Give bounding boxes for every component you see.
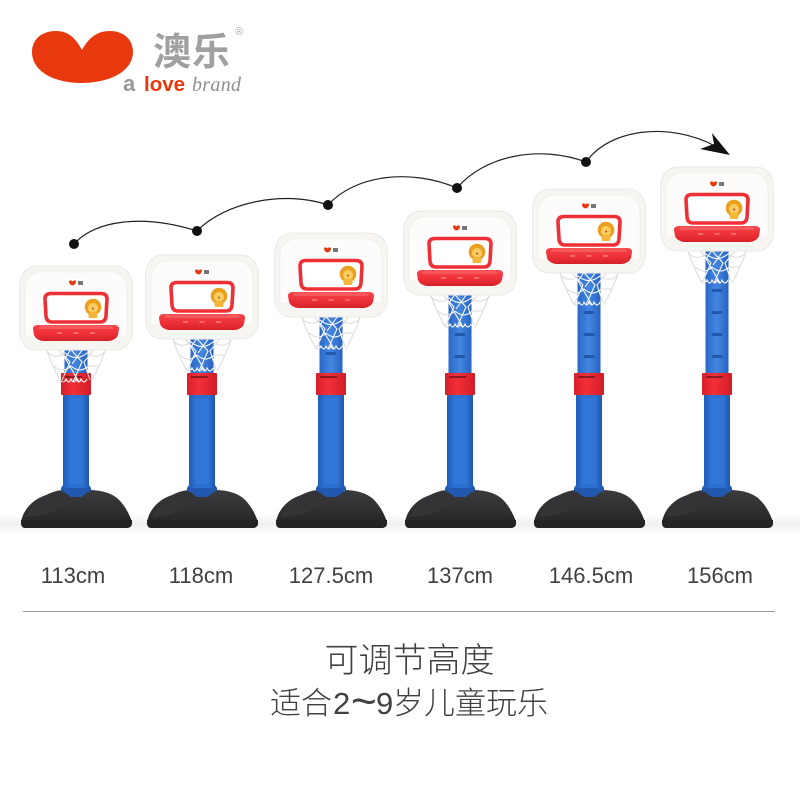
label 146.5cm: 146.5cm [549, 563, 633, 588]
subheading: 适合 [270, 678, 332, 723]
label 127.5cm: 127.5cm [289, 563, 373, 588]
arc path [76, 131, 715, 242]
label 118cm: 118cm [169, 563, 233, 588]
logo tagline: love [144, 73, 185, 96]
step dots [69, 157, 591, 249]
logo tagline: a [123, 71, 136, 96]
logo brand name: 澳乐 [153, 21, 231, 76]
registered mark: ® [235, 26, 243, 38]
logo heart [32, 31, 133, 83]
floor shadow band [0, 515, 800, 533]
subheading: 9 [376, 686, 393, 721]
label 113cm: 113cm [41, 563, 105, 588]
arrow head [700, 133, 730, 155]
subheading: 2 [333, 686, 350, 721]
hoop: 156cm [660, 167, 774, 528]
logo tagline: brand [192, 74, 242, 96]
subheading: 岁儿童玩乐 [393, 678, 548, 723]
logo [32, 21, 243, 96]
hoop: 146.5cm [532, 189, 646, 528]
growth arrow [69, 131, 730, 249]
hoop: 113cm [20, 266, 132, 528]
height labels [41, 563, 753, 588]
hoop: 137cm [404, 211, 516, 528]
label 156cm: 156cm [687, 563, 753, 588]
logo tagline [123, 71, 242, 96]
label 137cm: 137cm [427, 563, 493, 588]
hoop: 127.5cm [274, 233, 388, 528]
heading: 可调节高度 [324, 633, 494, 682]
hoop: 118cm [146, 255, 258, 528]
subheading: ~ [351, 677, 377, 726]
